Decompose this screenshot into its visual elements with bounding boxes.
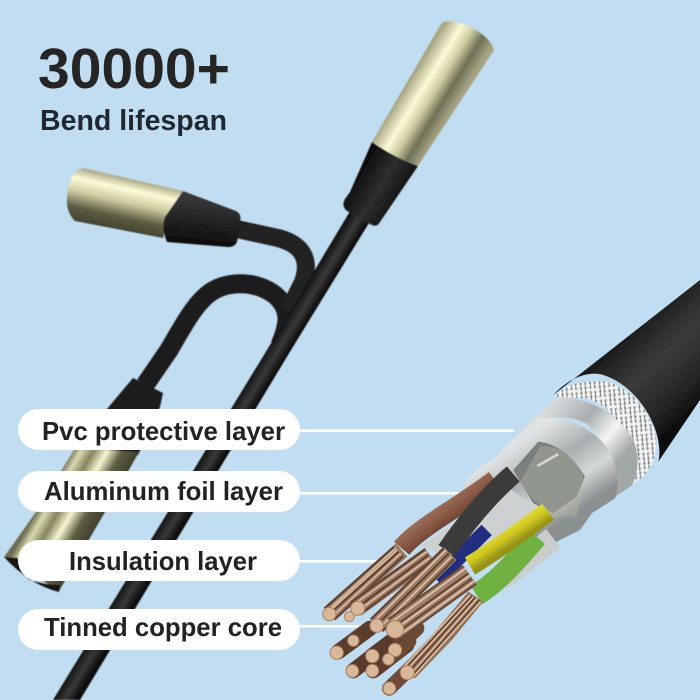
inner sleeve	[463, 418, 617, 543]
inner dark core	[513, 442, 585, 513]
label: Aluminum foil layer: Aluminum foil layer	[44, 476, 283, 506]
side connector gold barrel	[67, 168, 183, 238]
label: Aluminum foil layer	[18, 471, 300, 512]
audio cable with connectors	[4, 21, 494, 700]
subtitle: Bend lifespan: Bend lifespan	[40, 105, 227, 137]
copper bundle 5 dark strands	[405, 596, 479, 675]
copper strand ends	[323, 601, 414, 695]
blue wire	[437, 530, 487, 580]
braided shield	[555, 381, 656, 485]
label line: pvc	[300, 430, 514, 432]
top connector strain relief	[343, 142, 418, 226]
silver lower wire	[500, 538, 553, 580]
cable loop	[145, 284, 287, 385]
drain wire	[537, 454, 558, 466]
label line: insulation	[300, 560, 385, 562]
label line: copper	[300, 625, 373, 628]
copper bundle 4	[388, 566, 476, 637]
lower connector strain relief	[75, 378, 163, 455]
brown wire	[402, 480, 495, 548]
copper bundle 5 strands	[403, 595, 481, 676]
copper bundle 1	[325, 547, 403, 619]
label: Tinned copper core: Tinned copper core	[44, 612, 282, 642]
yellow wire	[470, 512, 548, 566]
copper bundle 5	[400, 592, 483, 678]
outer black jacket	[553, 280, 700, 462]
lower connector gold barrel	[4, 448, 139, 591]
copper bundle 3	[371, 548, 454, 631]
label line: foil	[300, 492, 473, 494]
side connector strain relief	[163, 191, 240, 247]
label: Insulation layer	[18, 540, 300, 581]
label: Insulation layer: Insulation layer	[69, 546, 257, 576]
label: Pvc protective layer: Pvc protective layer	[42, 416, 285, 446]
silver filler	[420, 487, 547, 560]
top connector gold barrel	[372, 21, 494, 166]
film overlay	[520, 446, 585, 517]
label: Tinned copper core	[18, 609, 300, 650]
copper bundle 2	[351, 549, 432, 614]
copper bundle: dark rear	[338, 628, 417, 688]
lower connector opening	[4, 557, 60, 592]
aluminium foil band	[520, 398, 638, 497]
grey-black wire	[447, 474, 513, 551]
green wire	[477, 537, 537, 595]
main cable	[53, 208, 372, 700]
side connector cable	[232, 228, 306, 312]
title: 30000+: 30000+	[38, 37, 230, 101]
cable cross-section	[323, 280, 700, 695]
label: Pvc protective layer	[18, 409, 300, 450]
